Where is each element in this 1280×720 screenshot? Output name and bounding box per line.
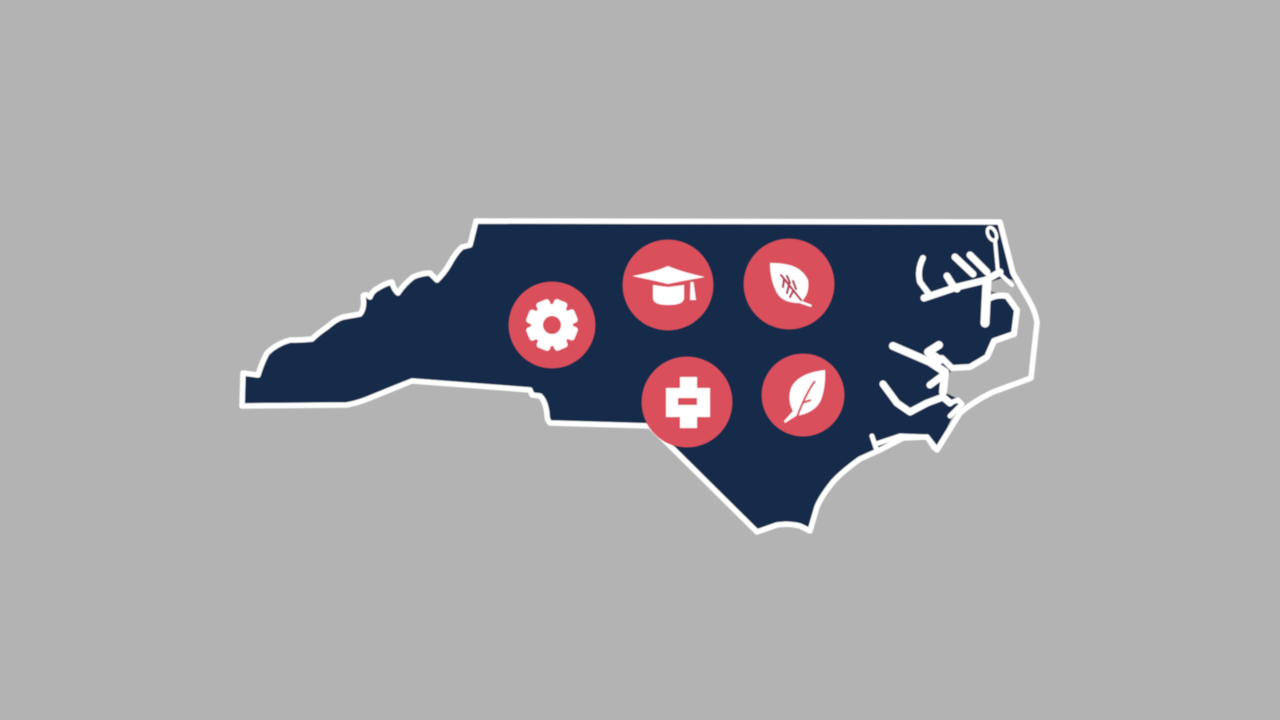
map: North Carolina state shape	[242, 221, 1037, 532]
sound: grey water behind the barrier islands	[937, 278, 1037, 450]
coastline: Albemarle Sound inlets	[872, 226, 1017, 448]
icon: medical cross in red circle	[642, 356, 732, 448]
icon: feather leaf in red circle	[762, 354, 844, 436]
icon: gear in red circle	[508, 282, 596, 368]
icon: veined leaf in red circle	[744, 238, 834, 330]
coastline: Pamlico Sound inlets	[893, 346, 945, 392]
icon: graduation cap in red circle	[622, 240, 714, 330]
barrier islands: outer banks line	[937, 222, 1037, 450]
state outline and fill	[242, 221, 1037, 532]
